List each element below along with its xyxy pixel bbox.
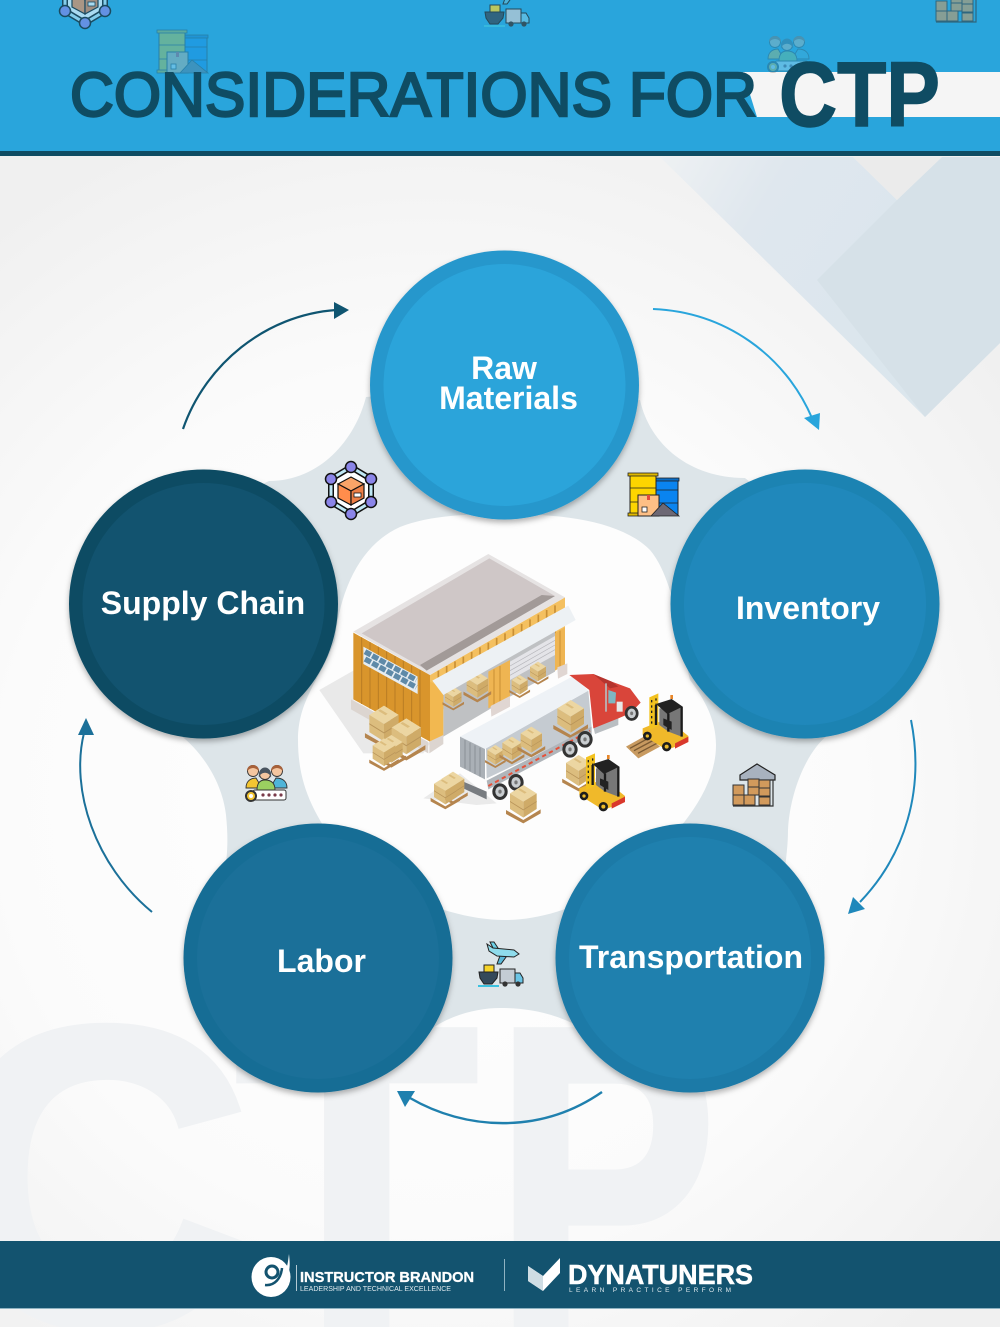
node: supply chain bbox=[69, 470, 338, 738]
warehouse scene illustration bbox=[319, 554, 688, 823]
title: CTP bbox=[779, 44, 940, 146]
logo: Instructor Brandon bbox=[252, 1254, 474, 1297]
forklift: front bbox=[579, 753, 625, 811]
node: labor: Labor bbox=[277, 943, 366, 979]
arrow: transportation to labor bbox=[397, 1091, 602, 1123]
node: inventory bbox=[670, 470, 940, 738]
node: raw materials: Raw bbox=[471, 350, 537, 386]
node: labor bbox=[184, 824, 452, 1092]
arrow: raw materials to inventory bbox=[653, 309, 820, 430]
header band bbox=[0, 0, 1000, 156]
footer band bbox=[0, 1241, 1000, 1309]
node: inventory: Inventory bbox=[736, 590, 880, 626]
icon: barrels and materials bbox=[628, 473, 679, 516]
node: transportation bbox=[556, 824, 824, 1092]
node: raw materials bbox=[370, 250, 639, 520]
grey star behind the cycle bbox=[180, 385, 828, 1030]
icon: plane, ship and truck bbox=[478, 942, 523, 987]
logo: Dynatuners bbox=[528, 1258, 753, 1294]
faded header icons bbox=[60, 0, 978, 73]
watermark: CTP bbox=[0, 1014, 716, 1327]
arrow: labor to supply chain bbox=[78, 718, 152, 912]
icon: warehouse stock bbox=[733, 764, 775, 806]
node: raw materials: Materials bbox=[439, 380, 578, 416]
title: CONSIDERATIONS FOR bbox=[70, 61, 757, 130]
arrow: supply chain to raw materials bbox=[183, 302, 349, 429]
logo: Dynatuners: DYNATUNERS bbox=[568, 1259, 753, 1290]
warehouse building bbox=[319, 554, 576, 753]
logo: Instructor Brandon: LEADERSHIP AND TECHNICAL EXCELLENCE bbox=[300, 1286, 451, 1293]
logo: Dynatuners: LEARN PRACTICE PERFORM bbox=[569, 1287, 731, 1294]
title bbox=[70, 44, 940, 146]
forklift: right bbox=[643, 693, 688, 751]
crates by the building bbox=[365, 706, 425, 771]
arrow: inventory to transportation bbox=[848, 720, 915, 914]
pallet bbox=[626, 735, 660, 758]
node: transportation: Transportation bbox=[579, 939, 803, 975]
icon: supply network bbox=[326, 462, 376, 520]
truck bbox=[423, 674, 641, 805]
icon: workers bbox=[246, 765, 287, 801]
loose crates bbox=[431, 755, 595, 823]
logo: Instructor Brandon: INSTRUCTOR BRANDON bbox=[300, 1269, 474, 1286]
node: supply chain: Supply Chain bbox=[101, 585, 305, 621]
central white blob bbox=[298, 514, 716, 920]
